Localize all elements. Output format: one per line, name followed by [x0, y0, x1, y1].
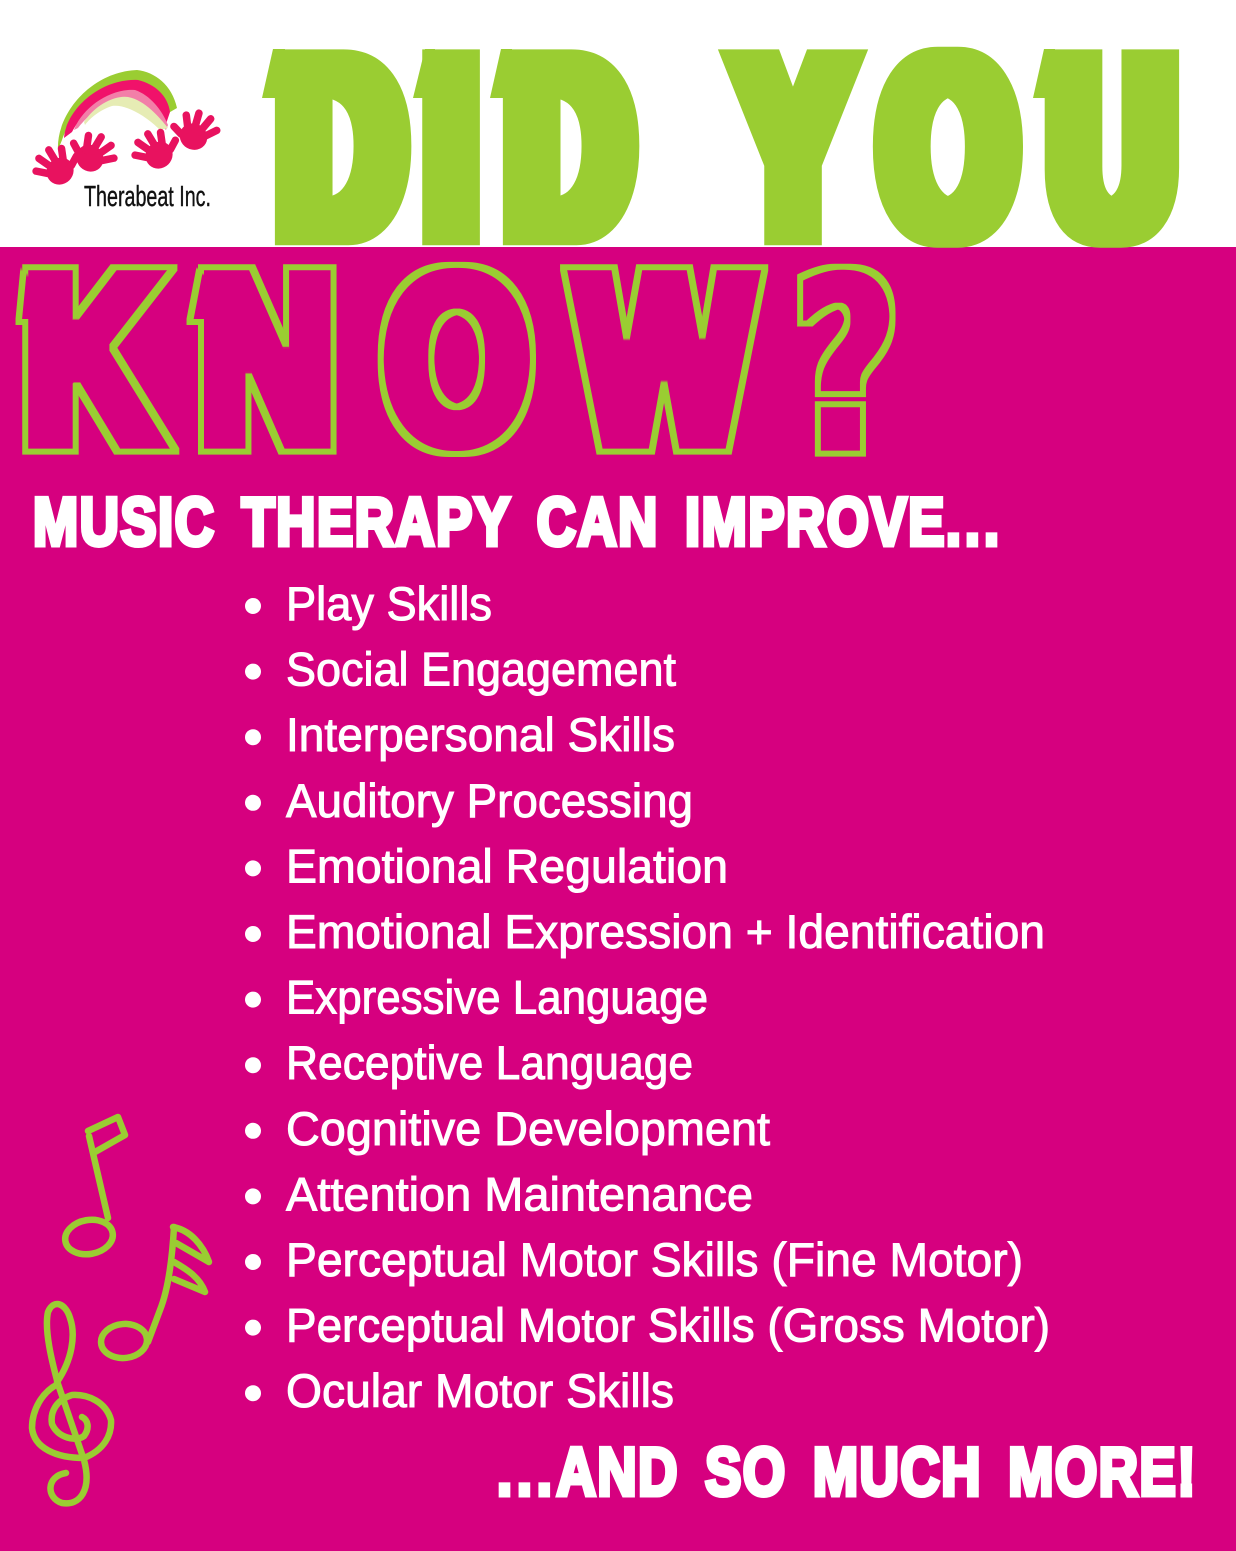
- item: Emotional Regulation: Emotional Regulation: [286, 839, 728, 892]
- item: Ocular Motor Skills: Ocular Motor Skills: [286, 1364, 674, 1417]
- title: KNOW? outlined: KNOW: [25, 226, 752, 494]
- logo rainbow: [58, 70, 177, 150]
- logo: Therabeat Inc.: [31, 70, 220, 213]
- logo hand 4: [168, 105, 220, 156]
- item: Emotional Expression + Identification: Emotional Expression + Identification: [286, 905, 1045, 958]
- icon: eighth note: [62, 1117, 125, 1258]
- icon: sixteenth note: [100, 1227, 209, 1360]
- logo hand 2: [65, 126, 119, 179]
- title: DID YOU: DID YOU: [280, 5, 1173, 289]
- title: KNOW? outlined: ?: [795, 225, 897, 507]
- subheading: MUSIC THERAPY CAN IMPROVE...: [33, 484, 1003, 560]
- item: Cognitive Development: Cognitive Development: [286, 1102, 770, 1155]
- item: Receptive Language: Receptive Language: [286, 1036, 693, 1089]
- icon: treble clef: [32, 1304, 111, 1503]
- logo hand 3: [130, 123, 184, 176]
- item: Play Skills: Play Skills: [286, 577, 492, 630]
- logo wordmark: Therabeat Inc.: [84, 181, 211, 213]
- logo hand 1: [31, 139, 85, 192]
- item: Social Engagement: Social Engagement: [286, 643, 676, 696]
- item: Expressive Language: Expressive Language: [286, 971, 708, 1024]
- background: white header band: [0, 0, 1236, 247]
- item: Interpersonal Skills: Interpersonal Skills: [286, 708, 675, 761]
- bulleted list of skills: [246, 577, 1050, 1417]
- item: Perceptual Motor Skills (Fine Motor): Perceptual Motor Skills (Fine Motor): [286, 1233, 1023, 1286]
- icon: music notes and treble clef: [32, 1117, 209, 1503]
- item: Auditory Processing: Auditory Processing: [286, 774, 693, 827]
- item: Perceptual Motor Skills (Gross Motor): Perceptual Motor Skills (Gross Motor): [286, 1299, 1050, 1352]
- item: Attention Maintenance: Attention Maintenance: [286, 1167, 753, 1220]
